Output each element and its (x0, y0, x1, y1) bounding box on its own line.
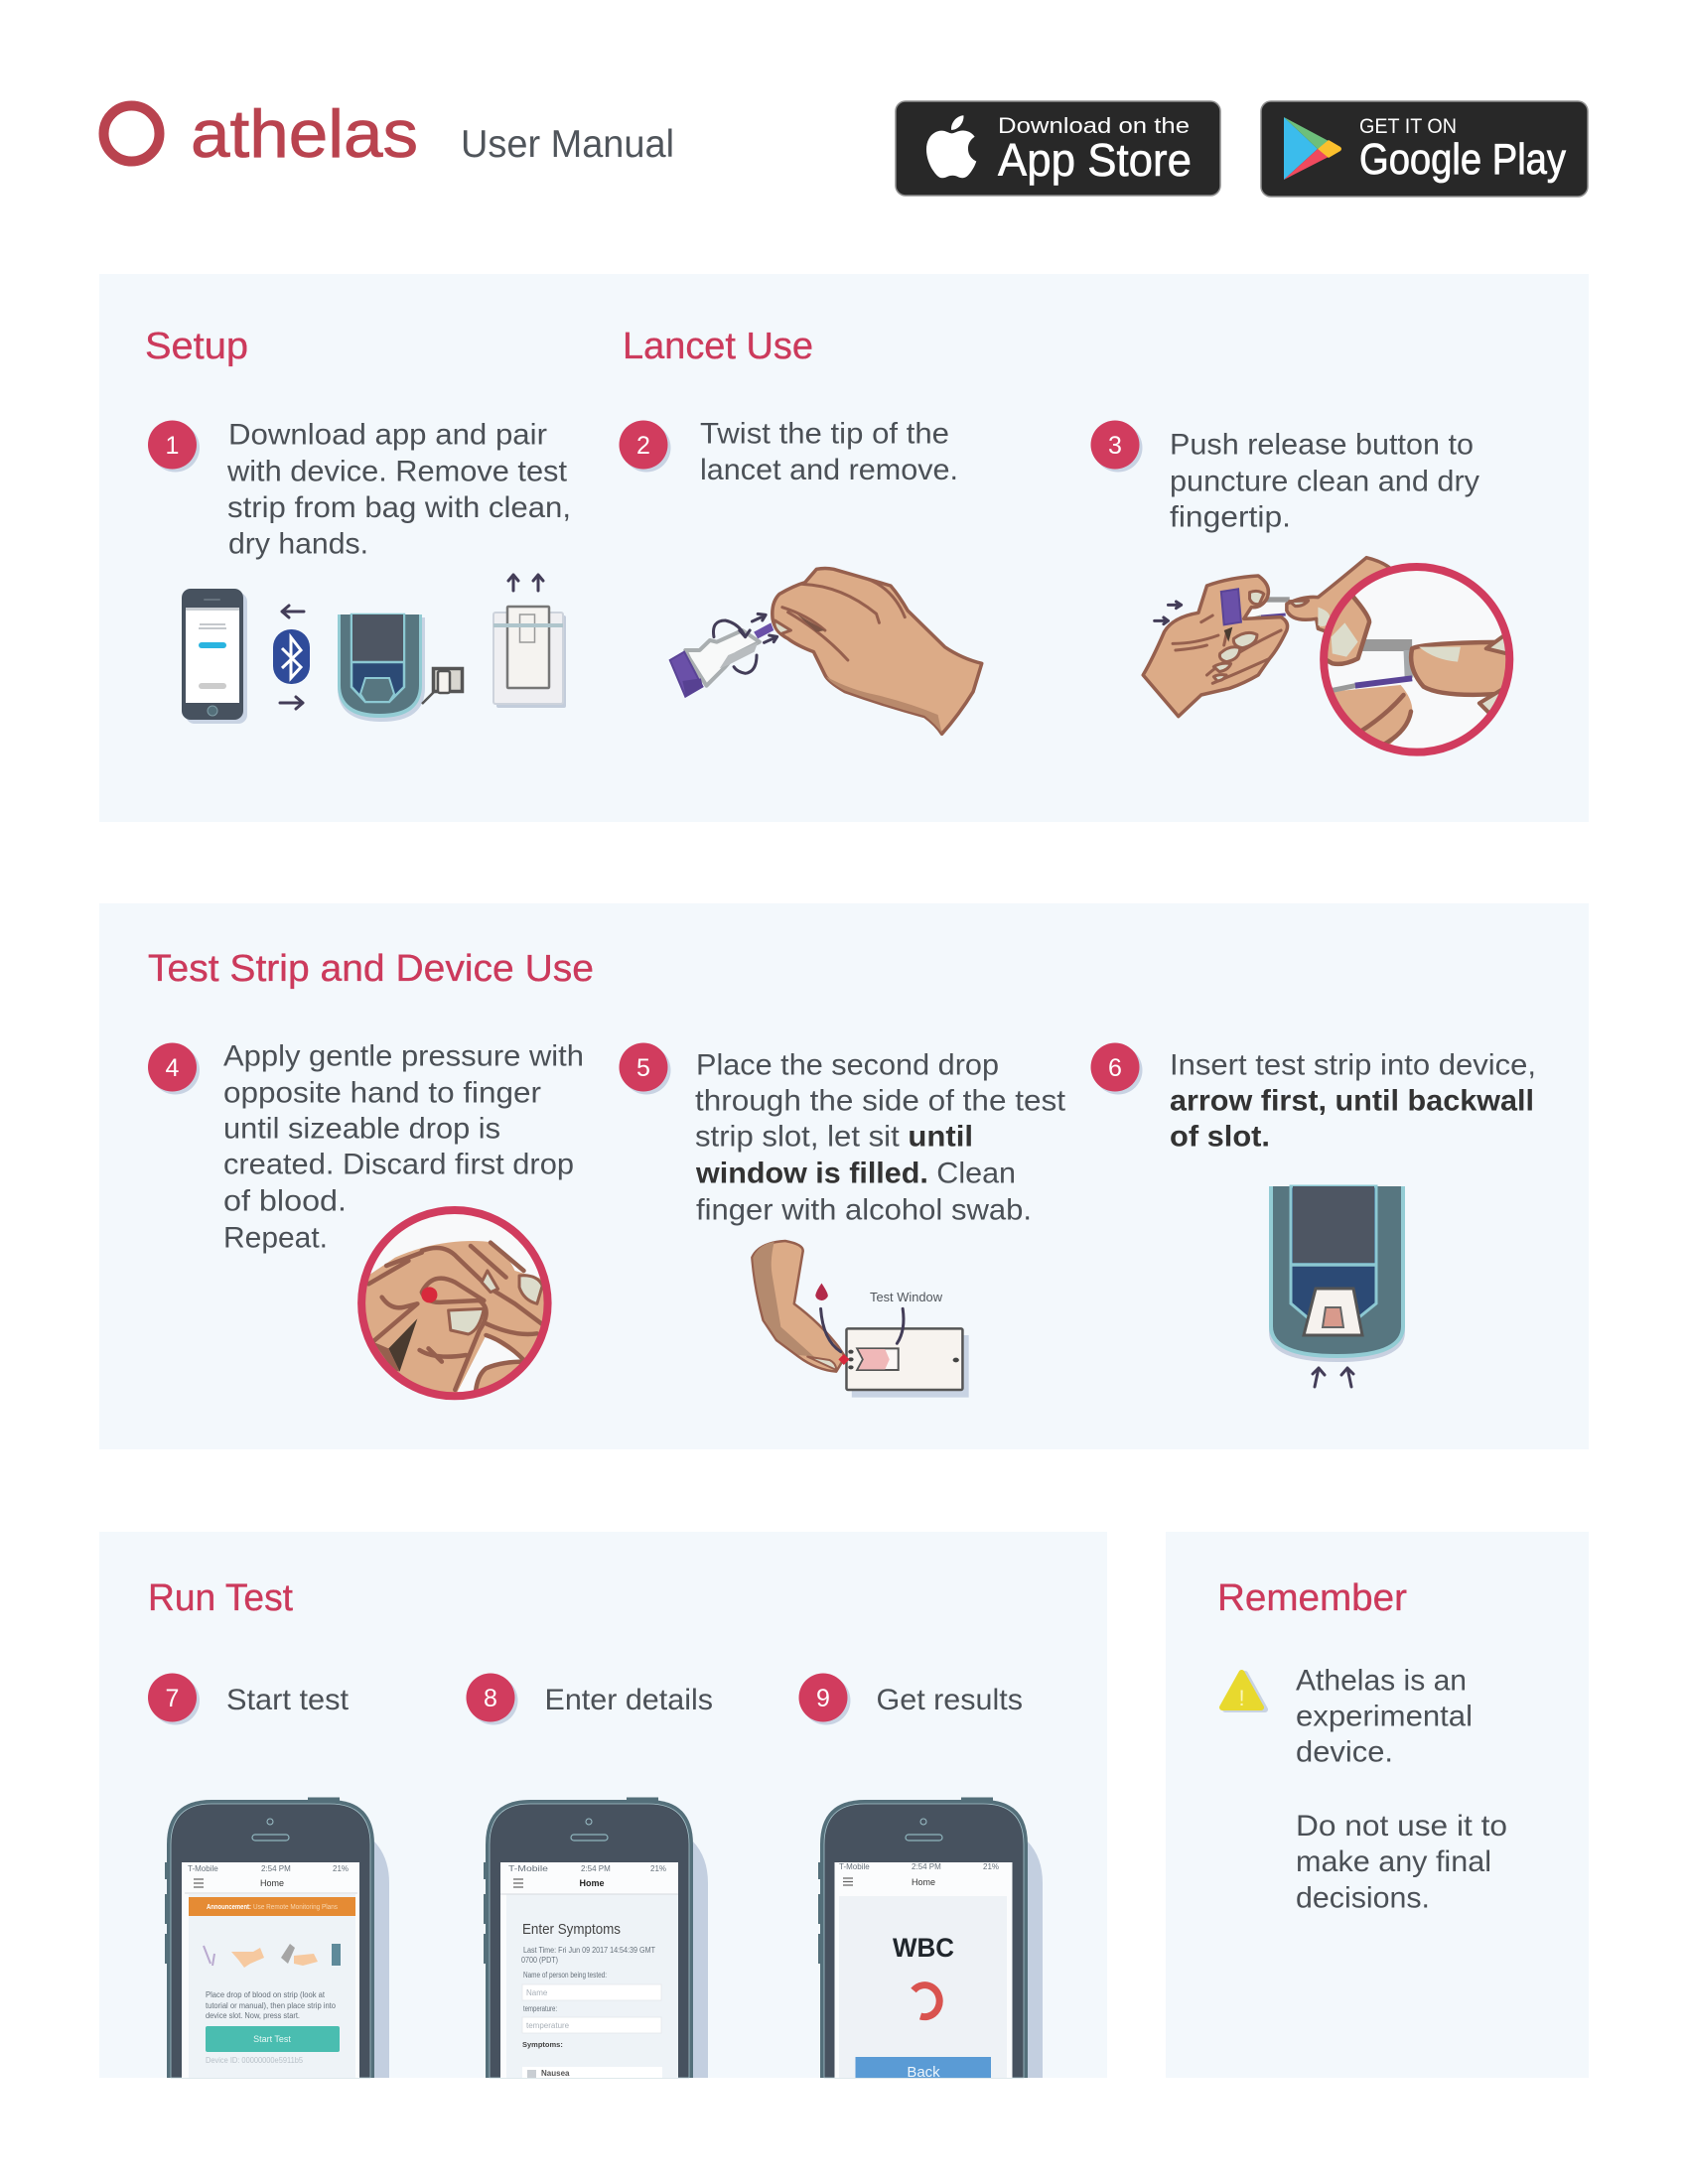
phone: enter symptoms screen: Last Time: Fri Jun 09 2017 14:54:39 GMT (523, 1946, 655, 1955)
step 2 text (700, 417, 958, 486)
step 6 text: of slot. (1170, 1120, 1270, 1154)
step 2 text: Twist the tip of the (700, 417, 949, 451)
step 5 text: window is filled. Clean (695, 1158, 1016, 1189)
phone: start test screen: T-Mobile (188, 1864, 218, 1873)
heading: Test Strip and Device Use: Test Strip and Device Use (148, 948, 594, 990)
heading: Remember: Remember (1217, 1577, 1407, 1619)
icon: warning triangle: ! (1238, 1686, 1245, 1710)
logo: athelas: athelas (191, 96, 418, 172)
icon: test strip callout (422, 669, 463, 704)
logo: athelas (103, 96, 418, 172)
heading: Run Test: Run Test (148, 1577, 293, 1619)
step 4 text: opposite hand to finger (223, 1076, 541, 1110)
step 5 number (620, 1042, 671, 1094)
phone: start test screen: Start Test (253, 2034, 291, 2044)
step 1 text: dry hands. (228, 528, 368, 560)
phone: WBC results screen: 21% (983, 1862, 999, 1871)
step 8 text: Enter details (544, 1684, 713, 1716)
remember text: no final decisions (1296, 1810, 1507, 1914)
step 7 text: Start test (226, 1684, 350, 1716)
step 1 number (148, 421, 200, 473)
phone: enter symptoms screen: temperature (526, 2021, 570, 2030)
phone: start test screen: Place drop of blood on strip (look at (206, 1990, 326, 1999)
step 4 text: Repeat. (223, 1221, 328, 1255)
step 9 number: 9 (816, 1685, 830, 1712)
step 3 text: Push release button to (1170, 429, 1474, 461)
step 3 number: 3 (1108, 432, 1122, 460)
illustration: blood drop applied to test strip window (752, 1241, 969, 1398)
phone: enter symptoms screen: 0700 (PDT) (521, 1956, 558, 1965)
step 1 number: 1 (166, 432, 179, 460)
remember text: no final decisions: Do not use it to (1296, 1810, 1507, 1843)
remember text: experimental device: experimental (1296, 1700, 1473, 1733)
phone: enter symptoms screen: Name of person being tested: (523, 1971, 607, 1979)
step 4 number (148, 1042, 200, 1094)
step 2 text: lancet and remove. (700, 454, 958, 486)
phone: enter symptoms screen: temperature: (523, 2004, 557, 2013)
step 1 text (226, 419, 571, 560)
step 7 number: 7 (166, 1685, 179, 1712)
step 9 number (798, 1674, 850, 1725)
heading: Setup: Setup (145, 326, 248, 367)
badge: Google Play (1261, 101, 1588, 197)
phone: enter symptoms screen: 2:54 PM (581, 1864, 611, 1873)
step 3 text: fingertip. (1170, 500, 1291, 534)
phone: enter symptoms screen (484, 1797, 708, 2078)
phone: enter symptoms screen: 21% (650, 1864, 666, 1873)
step 3 text: puncture clean and dry (1170, 465, 1479, 498)
phone: enter symptoms screen: T-Mobile (508, 1864, 549, 1873)
step 4 text: created. Discard first drop (223, 1148, 574, 1181)
step 4 text (223, 1040, 584, 1255)
phone: start test screen: Use Remote Monitoring Plans (253, 1904, 338, 1911)
phone: start test screen: 2:54 PM (261, 1864, 291, 1873)
illustration: squeezing finger for blood drop (351, 1210, 559, 1410)
step 6 text: arrow first, until backwall (1170, 1084, 1534, 1118)
step 5 number: 5 (636, 1054, 650, 1082)
panel: remember (1166, 1532, 1589, 2078)
step 6 text (1170, 1048, 1536, 1154)
step 5 text: finger with alcohol swab. (696, 1193, 1032, 1227)
phone: start test screen: Announcement: (207, 1902, 251, 1911)
phone: enter symptoms screen: Symptoms: (522, 2040, 563, 2049)
phone: start test screen: Home (260, 1878, 284, 1888)
step 8 number: 8 (484, 1685, 497, 1712)
subtitle: User Manual: User Manual (461, 123, 674, 166)
step 2 number: 2 (636, 432, 650, 460)
phone: start test screen: Device ID: 00000000e5911b5 (206, 2056, 304, 2065)
phone: WBC results screen: 2:54 PM (912, 1862, 941, 1871)
illustration: hand twisting lancet (670, 568, 982, 734)
step 1 text: Download app and pair (228, 419, 547, 451)
step 5 text: Place the second drop (696, 1048, 999, 1082)
phone: enter symptoms screen: Home (579, 1878, 605, 1888)
phone: WBC results screen: Back (907, 2064, 940, 2081)
phone: start test screen: tutorial or manual), then place strip into (206, 2001, 337, 2010)
step 1 text: with device. Remove test (226, 455, 568, 488)
step 2 number (620, 421, 671, 473)
step 4 text: Apply gentle pressure with (223, 1040, 584, 1072)
icon: bluetooth (273, 629, 310, 684)
phone: WBC results screen (818, 1797, 1043, 2081)
step 6 text: Insert test strip into device, (1170, 1048, 1536, 1082)
arrow: phone to device (280, 697, 303, 709)
remember text: experimental device: device. (1296, 1735, 1393, 1769)
phone: WBC results screen: WBC (893, 1933, 954, 1963)
label: Test Window: Test Window (870, 1290, 943, 1304)
illustration: device with strip inserted (1269, 1186, 1405, 1387)
step 6 number (1090, 1042, 1142, 1094)
step 9 text: Get results (876, 1684, 1023, 1716)
icon: test strip in bag (493, 575, 566, 708)
step 4 number: 4 (166, 1054, 180, 1082)
phone: enter symptoms screen: Enter Symptoms (522, 1921, 621, 1938)
step 4 text: of blood. (223, 1185, 347, 1217)
icon: device (338, 614, 425, 722)
step 1 text: strip from bag with clean, (227, 491, 571, 524)
step 7 number (148, 1674, 200, 1725)
phone: start test screen: 21% (333, 1864, 349, 1873)
icon: phone with pairing screen (182, 589, 247, 724)
panel: setup and lancet use (99, 274, 1589, 822)
heading: Lancet Use: Lancet Use (623, 326, 813, 367)
phone: enter symptoms screen: Name (526, 1988, 548, 1997)
step 6 number: 6 (1108, 1054, 1122, 1082)
phone: enter symptoms screen: Nausea (541, 2069, 570, 2078)
phone: WBC results screen: T-Mobile (839, 1862, 870, 1871)
step 5 text: strip slot, let sit until (695, 1120, 973, 1154)
arrow: device to phone (282, 606, 304, 617)
badge: Google Play: GET IT ON (1359, 115, 1457, 138)
panel: test strip and device use (99, 903, 1589, 1449)
phone: start test screen: device slot. Now, press start. (206, 2011, 300, 2020)
remember text: experimental device: Athelas is an (1296, 1664, 1467, 1698)
panel: run test (99, 1532, 1107, 2081)
badge: App Store: Download on the (998, 113, 1190, 138)
step 8 number (467, 1674, 518, 1725)
phone: WBC results screen: Home (912, 1877, 935, 1887)
remember text: no final decisions: make any final (1296, 1845, 1491, 1878)
step 3 number (1090, 421, 1142, 473)
illustration: hands pushing lancet release (1143, 558, 1526, 752)
step 5 text (695, 1048, 1066, 1227)
remember text: no final decisions: decisions. (1296, 1882, 1430, 1914)
badge: App Store (896, 101, 1220, 196)
badge: Google Play: Google Play (1359, 135, 1566, 184)
badge: App Store: App Store (998, 134, 1192, 186)
step 5 text: through the side of the test (695, 1084, 1066, 1118)
remember text: experimental device (1296, 1664, 1473, 1769)
step 4 text: until sizeable drop is (223, 1112, 500, 1146)
step 3 text (1170, 429, 1479, 534)
phone: start test screen (165, 1797, 389, 2078)
icon: warning triangle (1222, 1673, 1265, 1710)
